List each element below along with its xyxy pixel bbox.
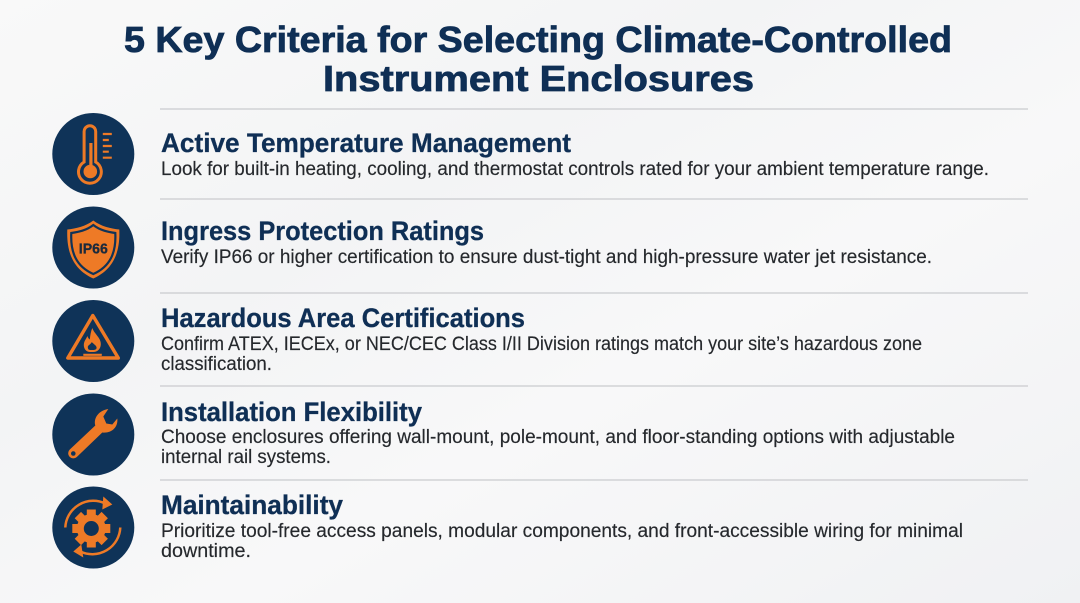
item: hazardous area certifications: classification. <box>161 354 272 375</box>
item: active temperature management: Look for built-in heating, cooling, and thermostat controls rated for your ambient temperature range. <box>161 159 989 180</box>
item: installation flexibility: Choose enclosures offering wall-mount, pole-mount, and floor-standing options with adjustable <box>161 427 955 448</box>
item: installation flexibility: Installation Flexibility <box>161 397 422 427</box>
icon: IP66 shield: IP66 <box>79 242 108 258</box>
item: maintainability: Prioritize tool-free access panels, modular components, and front-accessible wiring for minimal <box>161 521 963 542</box>
item: active temperature management: Active Temperature Management <box>161 128 571 158</box>
item: hazardous area certifications: Confirm ATEX, IECEx, or NEC/CEC Class I/II Division ratings match your site’s hazardous zone <box>161 334 922 355</box>
item: maintainability <box>161 490 963 562</box>
title <box>124 19 952 99</box>
item: installation flexibility <box>161 397 955 468</box>
item: ingress protection ratings <box>161 216 932 268</box>
item: ingress protection ratings: Ingress Protection Ratings <box>161 216 484 246</box>
title: Instrument Enclosures <box>323 58 754 99</box>
icon: hazard triangle <box>52 300 134 382</box>
item: installation flexibility: internal rail systems. <box>161 447 331 468</box>
item: maintainability: downtime. <box>161 541 251 562</box>
item: hazardous area certifications: Hazardous Area Certifications <box>161 303 525 333</box>
icon: wrench <box>52 394 134 476</box>
item: ingress protection ratings: Verify IP66 or higher certification to ensure dust-tight and high-pressure water jet resistance. <box>161 247 932 268</box>
title: 5 Key Criteria for Selecting Climate-Controlled <box>124 19 952 60</box>
item: active temperature management <box>161 128 989 180</box>
item: hazardous area certifications <box>161 303 922 375</box>
icon: IP66 shield <box>52 206 134 288</box>
item: maintainability: Maintainability <box>161 490 343 520</box>
icon: thermometer <box>52 113 134 195</box>
icon: gear with rotating arrows <box>52 486 134 568</box>
